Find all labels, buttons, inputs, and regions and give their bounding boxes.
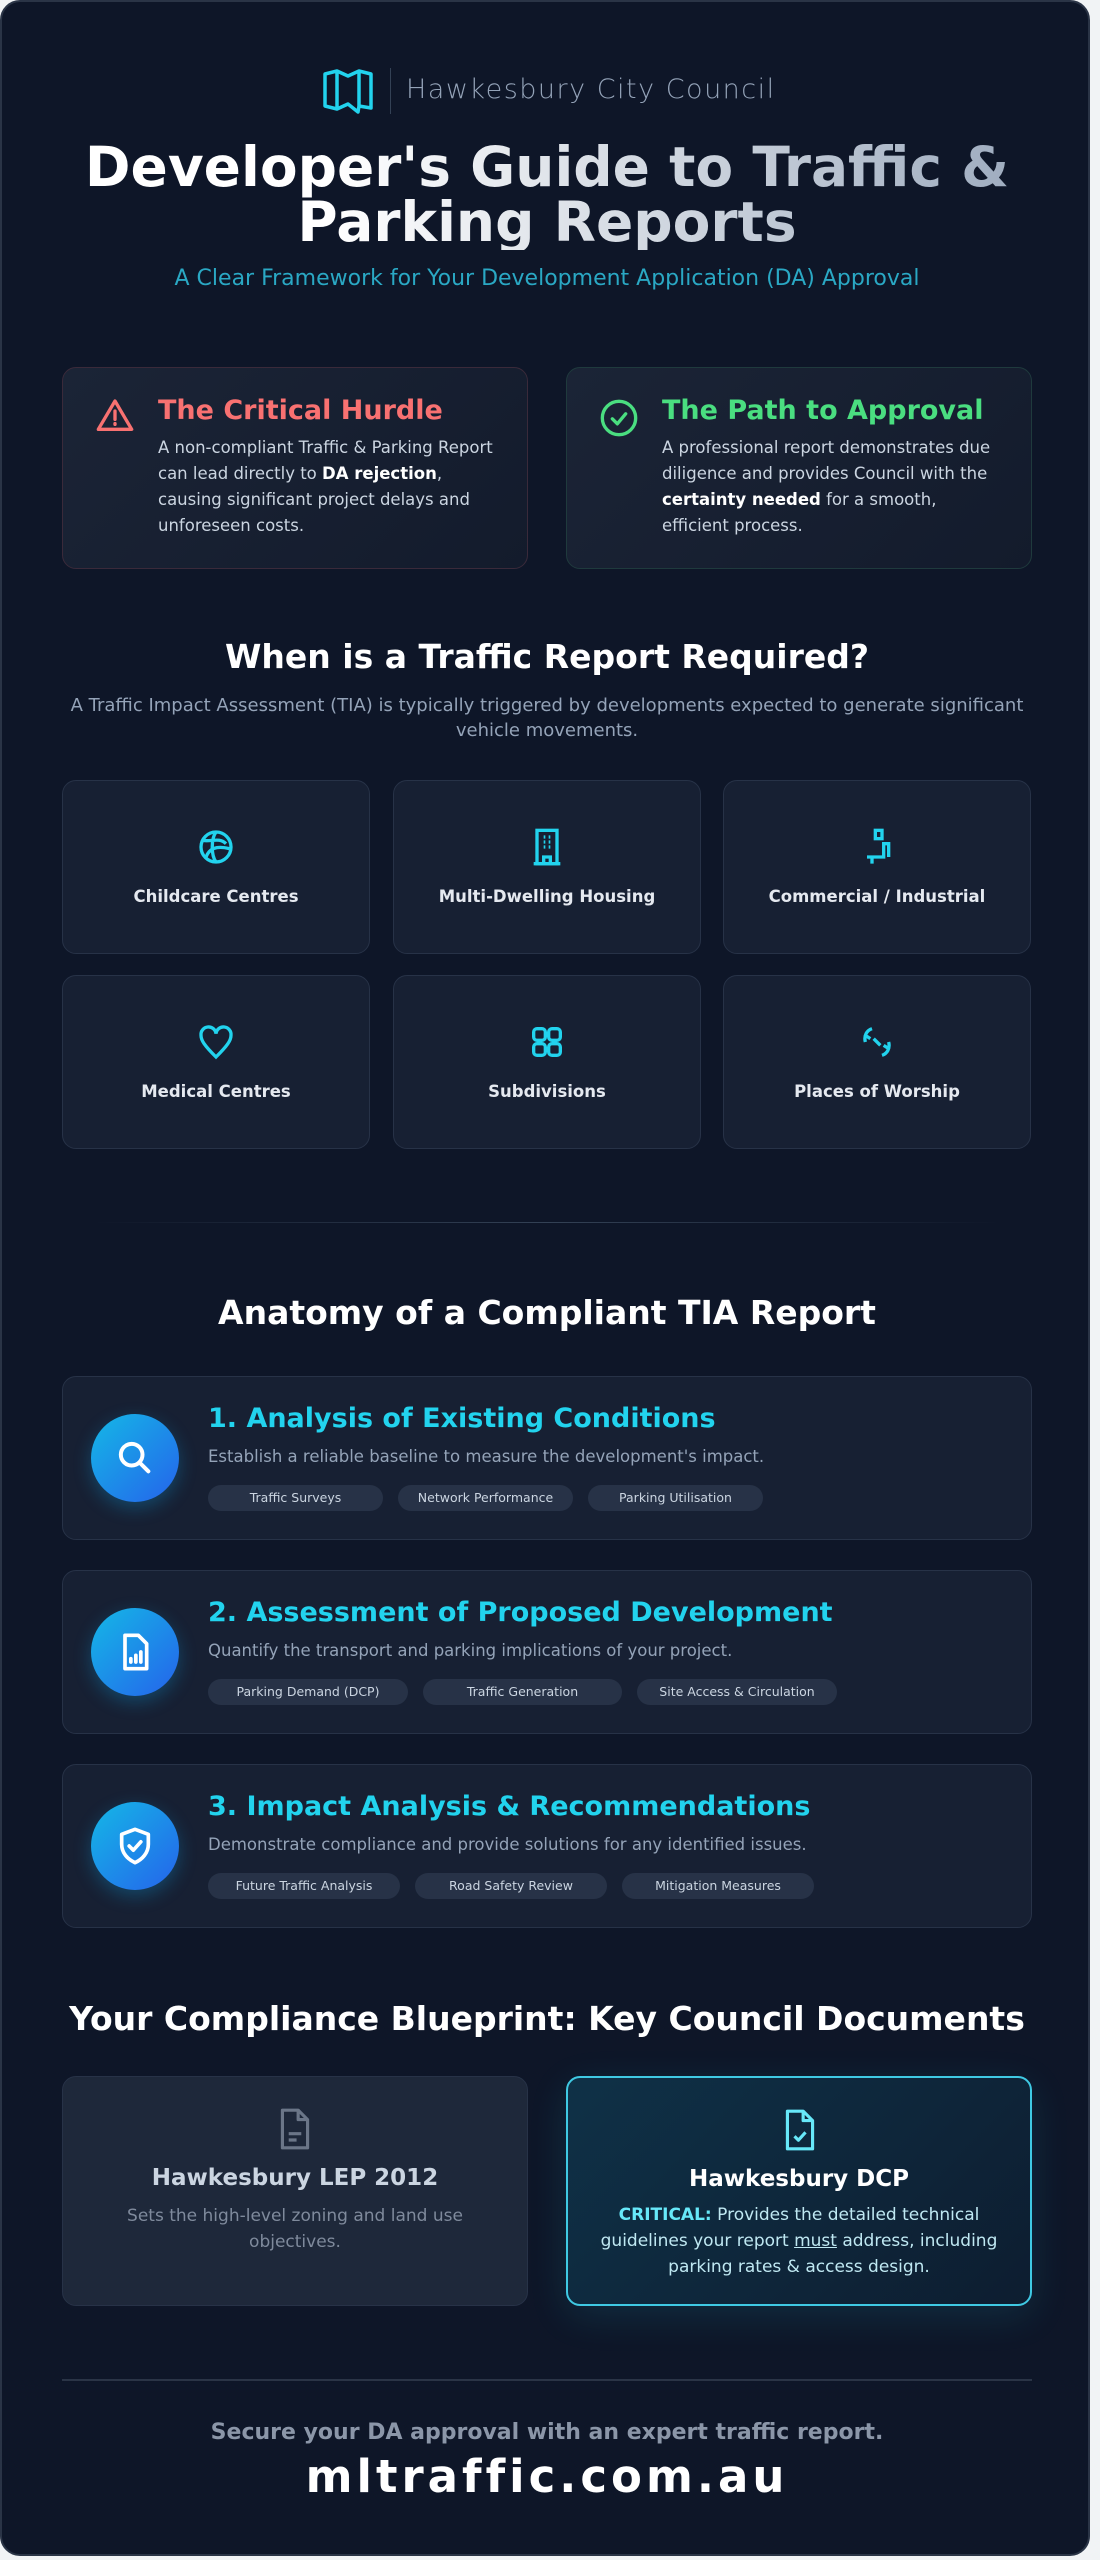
step 1: 1. Analysis of Existing Conditions	[208, 1403, 716, 1434]
heading: when required: When is a Traffic Report Required?	[225, 637, 869, 676]
pills: Parking Demand (DCP)	[237, 1684, 379, 1699]
panel: critical hurdle	[62, 367, 528, 569]
text: A non-compliant Traffic & Parking Report can lead directly to DA rejection, causing significant project delays and unforeseen costs.	[158, 438, 493, 535]
step 2: 2. Assessment of Proposed Development	[208, 1597, 833, 1628]
step 2	[62, 1570, 1032, 1734]
pills: Parking Utilisation	[619, 1490, 732, 1505]
step 2: Quantify the transport and parking implications of your project.	[208, 1641, 732, 1660]
tile: childcare: Childcare Centres	[133, 887, 299, 906]
panel: path to approval	[566, 367, 1032, 569]
text: A professional report demonstrates due diligence and provides Council with the certainty needed for a smooth, efficient process.	[662, 438, 990, 535]
step 3: 3. Impact Analysis & Recommendations	[208, 1791, 810, 1822]
step 3: Demonstrate compliance and provide solutions for any identified issues.	[208, 1835, 807, 1854]
icon: check circle	[600, 400, 638, 436]
pills	[208, 1485, 763, 1511]
footer url: mltraffic.com.au	[306, 2450, 788, 2503]
tile: worship	[723, 975, 1031, 1149]
icon: document check	[786, 2110, 814, 2150]
tile: commercial: Commercial / Industrial	[769, 887, 985, 906]
panel: DCP	[566, 2076, 1032, 2306]
step 1	[62, 1376, 1032, 1540]
step 3	[62, 1764, 1032, 1928]
icon: document chart	[91, 1608, 179, 1696]
description: A Traffic Impact Assessment (TIA) is typically triggered by developments expected to generate significant vehicle movements.	[71, 695, 1023, 741]
title: Hawkesbury DCP	[689, 2166, 909, 2192]
title: Hawkesbury LEP 2012	[152, 2165, 438, 2191]
heading: The Critical Hurdle	[158, 395, 443, 426]
step 1: Establish a reliable baseline to measure the development's impact.	[208, 1447, 764, 1466]
tile: medical	[62, 975, 370, 1149]
icon: document	[280, 2108, 310, 2150]
pills	[208, 1873, 814, 1899]
title	[2, 140, 1092, 250]
pills: Traffic Surveys	[250, 1490, 341, 1505]
pills: Future Traffic Analysis	[236, 1878, 372, 1893]
tile: multi-dwelling: Multi-Dwelling Housing	[439, 887, 655, 906]
title: Parking Reports	[297, 190, 797, 254]
icon: warning	[96, 399, 134, 431]
text: Sets the high-level zoning and land use objectives.	[127, 2206, 463, 2252]
tile: commercial	[723, 780, 1031, 954]
icon: search	[91, 1414, 179, 1502]
icon: map	[323, 69, 373, 114]
tile: multi-dwelling	[393, 780, 701, 954]
icon: shield check	[91, 1802, 179, 1890]
tile: medical: Medical Centres	[141, 1082, 291, 1101]
pills: Traffic Generation	[467, 1684, 578, 1699]
heading: The Path to Approval	[662, 395, 984, 426]
title: Developer's Guide to Traffic &	[85, 135, 1009, 199]
pills	[208, 1679, 837, 1705]
council name: Hawkesbury City Council	[406, 74, 776, 105]
tile: childcare	[62, 780, 370, 954]
header logo row	[323, 68, 776, 114]
footer tagline: Secure your DA approval with an expert traffic report.	[211, 2420, 883, 2445]
tile: subdivisions	[393, 975, 701, 1149]
heading: compliance blueprint: Your Compliance Blueprint: Key Council Documents	[69, 1999, 1025, 2038]
subtitle: A Clear Framework for Your Development Application (DA) Approval	[175, 266, 919, 291]
tile: subdivisions: Subdivisions	[488, 1082, 606, 1101]
pills: Network Performance	[418, 1490, 553, 1505]
panel: LEP	[62, 2076, 528, 2306]
tile: worship: Places of Worship	[794, 1082, 960, 1101]
heading: anatomy: Anatomy of a Compliant TIA Report	[218, 1293, 876, 1332]
pills: Site Access & Circulation	[659, 1684, 815, 1699]
pills: Mitigation Measures	[655, 1878, 781, 1893]
text: CRITICAL: Provides the detailed technical guidelines your report must address, including parking rates & access design.	[601, 2205, 997, 2277]
pills: Road Safety Review	[449, 1878, 573, 1893]
